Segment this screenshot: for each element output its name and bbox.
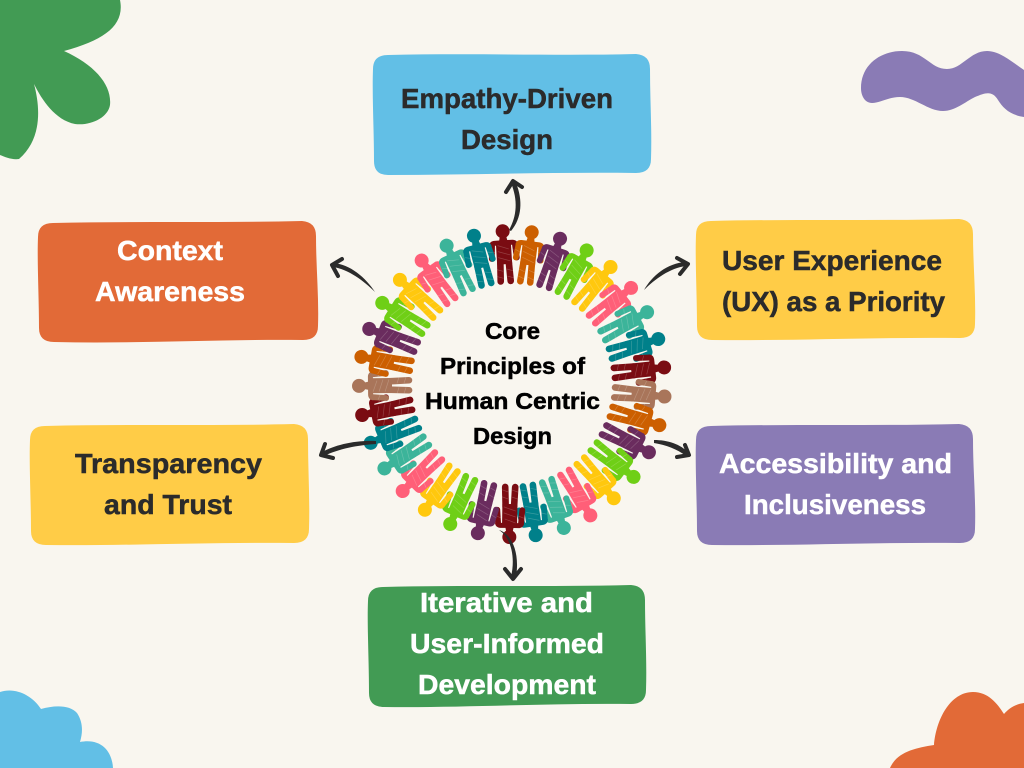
person: sea green [533, 476, 580, 539]
box: User Experience: User Experience [722, 245, 942, 276]
person: orange [511, 223, 547, 284]
box: Transparency and Trust: and Trust [104, 489, 232, 520]
center title: Human Centric [425, 388, 600, 414]
person: orange [352, 341, 413, 380]
box: Iterative and User-Informed Development [368, 585, 646, 707]
arrow: to Context Awareness [332, 259, 375, 292]
person: yellow [567, 252, 626, 315]
person: brown [352, 371, 409, 400]
person: sea green [596, 296, 660, 348]
box: Context Awareness: Context [117, 235, 223, 266]
center title [425, 318, 600, 449]
box: User Experience: (UX) as a Priority [722, 286, 945, 317]
person: maroon [613, 352, 673, 387]
person: purple [531, 228, 576, 291]
box: Iterative and User-Informed Development: User-Informed [410, 628, 604, 659]
person: purple [598, 417, 662, 468]
arrow: to User Experience [644, 258, 688, 290]
box: Accessibility and Inclusiveness: Accessibility and [719, 448, 952, 479]
person: teal [606, 323, 669, 368]
arrow: to Iterative [499, 530, 521, 579]
person: purple [462, 481, 503, 543]
box: Iterative and User-Informed Development: Iterative and [420, 587, 593, 618]
center title: Principles of [440, 353, 585, 379]
person: sea green [371, 429, 434, 484]
box: Accessibility and Inclusiveness: Inclusiveness [744, 489, 926, 520]
person: orange [607, 398, 670, 441]
box: Context Awareness: Awareness [95, 276, 245, 307]
person: pink [406, 246, 463, 309]
person: brown [613, 378, 673, 412]
person: purple [358, 313, 421, 360]
person: pink [552, 465, 606, 529]
person: teal [514, 484, 551, 544]
person: maroon [488, 223, 520, 282]
person: pink [583, 272, 646, 331]
arrow: to Accessibility [654, 440, 689, 457]
box: Context Awareness [38, 221, 318, 342]
box: Iterative and User-Informed Development: Development [418, 669, 596, 700]
blob: green top left [0, 0, 121, 159]
arrow: to Transparency [321, 441, 376, 458]
box: Transparency and Trust [30, 424, 309, 545]
blob: orange bottom right [890, 692, 1024, 768]
person: yellow [570, 451, 629, 513]
person: maroon [495, 487, 525, 544]
box: Accessibility and Inclusiveness [696, 424, 975, 545]
person: teal [359, 410, 422, 459]
person: sea green [431, 233, 481, 297]
person: pink [388, 446, 449, 506]
arrow: to Empathy-Driven Design [506, 181, 522, 231]
box: User Experience [696, 219, 975, 340]
center title: Design [473, 423, 552, 449]
box: Empathy-Driven Design [373, 54, 651, 175]
person: maroon [352, 391, 414, 431]
person: yellow [385, 264, 446, 325]
person: yellow [409, 460, 465, 524]
blob: blue bottom left [0, 691, 113, 768]
box: Transparency and Trust: Transparency [75, 448, 262, 479]
person: green [369, 287, 432, 342]
person: teal [458, 225, 500, 288]
blob: purple top right [861, 51, 1024, 117]
person: green [585, 435, 648, 493]
ring of people [352, 223, 673, 544]
center title: Core [485, 318, 540, 344]
person: green [550, 237, 603, 301]
box: Empathy-Driven Design: Empathy-Driven [401, 83, 613, 114]
box: Empathy-Driven Design: Design [461, 124, 553, 155]
person: green [434, 472, 484, 536]
